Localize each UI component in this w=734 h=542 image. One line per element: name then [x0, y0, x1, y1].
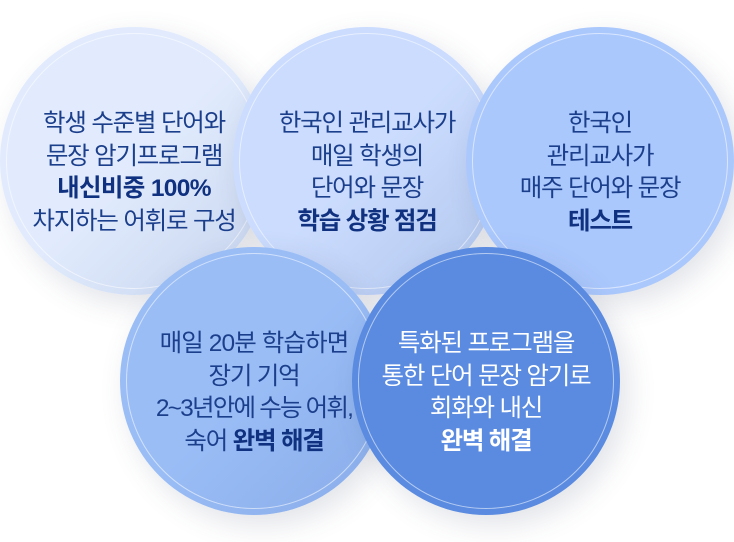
text: circle 5: 회화와 내신 — [430, 395, 542, 422]
text: circle 1 — [32, 110, 236, 234]
text: circle 1: 학생 수준별 단어와 — [43, 110, 225, 137]
panel: circle 3 weekly test — [466, 27, 734, 295]
text: circle 3: 관리교사가 — [547, 142, 653, 170]
text: circle 3 — [520, 110, 681, 234]
text: circle 4 — [156, 330, 352, 454]
text: circle 4: 숙어 완벽 해결 — [184, 428, 324, 454]
text: circle 2 — [279, 110, 456, 234]
text: circle 2: 매일 학생의 — [311, 142, 423, 170]
panel: circle 4 long-term memory — [120, 247, 388, 515]
text: circle 5: 통한 단어 문장 암기로 — [382, 362, 590, 390]
text: circle 4: 매일 20분 학습하면 — [160, 330, 348, 357]
text: circle 2: 단어와 문장 — [311, 175, 423, 202]
text: circle 5: 특화된 프로그램을 — [398, 330, 574, 357]
panel: circle 1 vocabulary program — [0, 27, 268, 295]
text: circle 2: 학습 상황 점검 — [297, 208, 437, 234]
text: circle 1: 내신비중 100% — [57, 175, 211, 202]
text: circle 3: 매주 단어와 문장 — [520, 175, 680, 202]
text: circle 3: 테스트 — [568, 208, 632, 234]
text: circle 4: 장기 기억 — [209, 362, 299, 390]
text: circle 1: 차지하는 어휘로 구성 — [32, 208, 236, 234]
text: circle 2: 한국인 관리교사가 — [279, 110, 455, 137]
text: circle 5: 완벽 해결 — [441, 428, 531, 454]
panel: circle 2 daily check — [233, 27, 501, 295]
text: circle 1: 문장 암기프로그램 — [46, 142, 222, 170]
panel: circle 5 conversation and exams — [352, 247, 620, 515]
text: circle 5 — [382, 330, 590, 454]
text: circle 3: 한국인 — [568, 110, 632, 137]
text: circle 4: 2~3년안에 수능 어휘, — [156, 395, 352, 422]
